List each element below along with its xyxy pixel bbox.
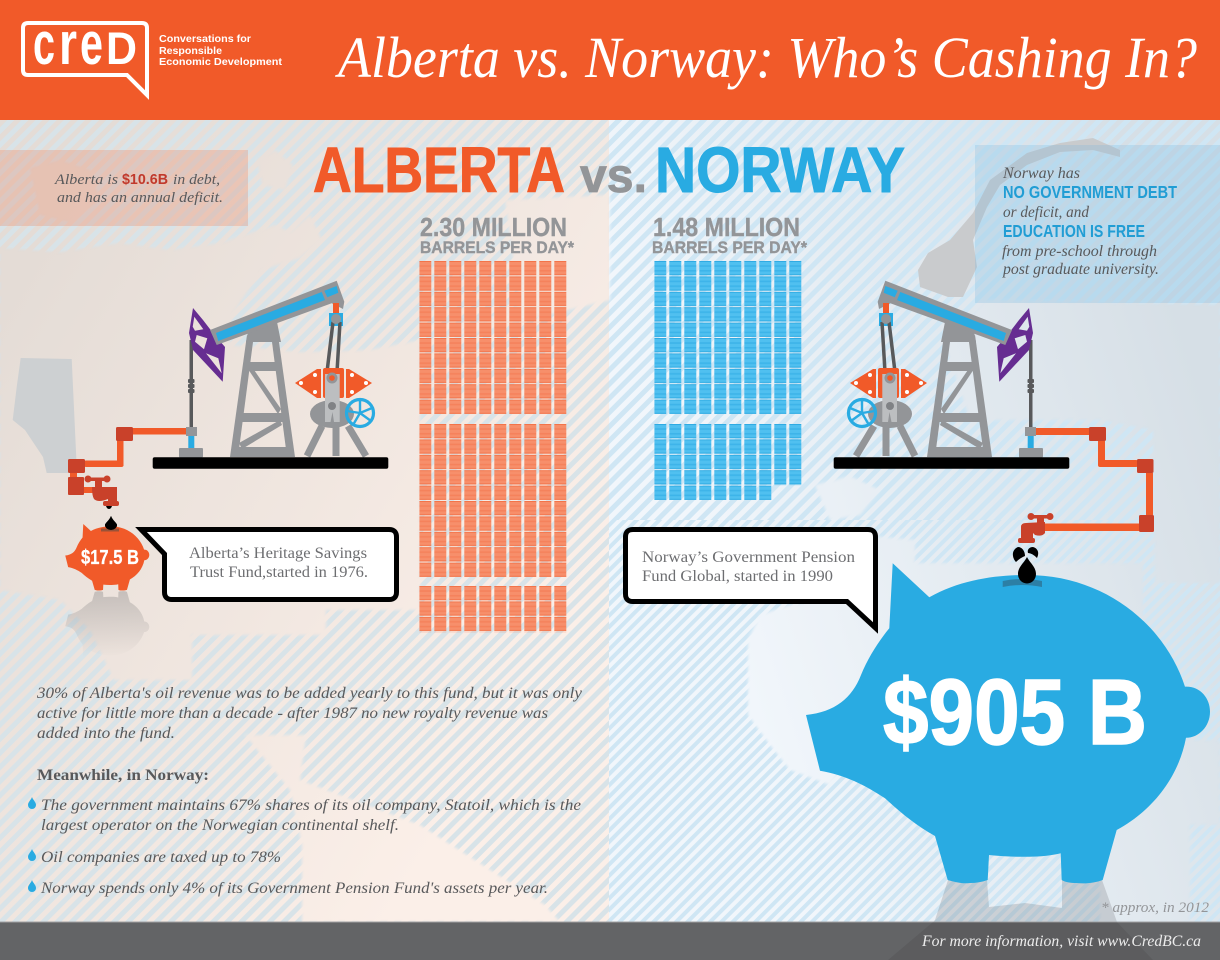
paragraph: Alberta revenue: 30% of Alberta's oil revenue was to be added yearly to this fund, but it was only xyxy=(36,685,583,702)
speech bubble: Norway fund xyxy=(626,530,876,628)
callout: Norway debt: post graduate university. xyxy=(1002,261,1159,278)
oil drops: Alberta xyxy=(105,506,117,530)
callout: Norway debt: EDUCATION IS FREE xyxy=(1003,221,1145,241)
bullet: pension spending: Norway spends only 4% of its Government Pension Fund's assets per year. xyxy=(40,880,548,897)
map: Norway xyxy=(918,138,1120,297)
speech bubble: Norway fund: Norway’s Government Pension xyxy=(642,549,855,566)
reflection: small pig xyxy=(65,591,149,658)
speech bubble: Alberta fund xyxy=(141,530,396,600)
bullet: oil tax: Oil companies are taxed up to 78% xyxy=(41,849,281,866)
CRED logo xyxy=(23,10,147,95)
pipe and faucet: Alberta xyxy=(68,427,186,506)
Norway production label: BARRELS PER DAY* xyxy=(652,238,807,257)
logo tagline: Conversations for xyxy=(159,33,251,45)
map: Alberta xyxy=(13,358,77,473)
pipe and faucet: Norway xyxy=(1018,427,1154,543)
heading: Alberta vs Norway: ALBERTA xyxy=(313,134,565,206)
speech bubble: Norway fund: Fund Global, started in 1990 xyxy=(642,568,833,585)
logo tagline xyxy=(159,33,283,68)
barrel grid: Norway xyxy=(654,261,802,501)
pumpjack: Norway xyxy=(834,281,1069,469)
paragraph: Alberta revenue: added into the fund. xyxy=(37,725,175,742)
callout: Norway debt: Norway has xyxy=(1002,165,1080,182)
CRED logo: r xyxy=(59,10,77,77)
logo tagline: Economic Development xyxy=(159,56,283,68)
header band xyxy=(0,0,1220,120)
paragraph: Alberta revenue xyxy=(36,685,583,742)
barrel grid: Alberta xyxy=(419,261,567,632)
big piggy bank: Norway xyxy=(806,563,1210,883)
logo tagline: Responsible xyxy=(159,45,222,57)
Norway production label: 1.48 MILLION xyxy=(653,212,800,242)
heading: Alberta vs Norway: vs. xyxy=(580,150,647,203)
callout: Alberta debt: and has an annual deficit. xyxy=(57,190,223,206)
CRED logo: D xyxy=(106,23,137,74)
footnote: * approx, in 2012 xyxy=(1101,900,1210,916)
CRED logo: e xyxy=(80,10,103,77)
callout: Norway debt: or deficit, and xyxy=(1003,204,1089,221)
heading: Alberta vs Norway: NORWAY xyxy=(655,134,905,206)
reflection: big pig xyxy=(933,880,1117,922)
subheading: Meanwhile in Norway: Meanwhile, in Norway: xyxy=(37,767,209,784)
small piggy bank: Alberta xyxy=(65,516,149,591)
Alberta production label xyxy=(420,212,574,257)
big piggy bank: Norway: $905 B xyxy=(883,660,1147,764)
callout: Norway debt xyxy=(975,145,1220,303)
Norway production label xyxy=(652,212,807,257)
callout: Norway debt: NO GOVERNMENT DEBT xyxy=(1003,182,1177,202)
paragraph: Alberta revenue: active for little more than a decade - after 1987 no new royalty revenue was xyxy=(37,705,548,722)
heading: Alberta vs Norway xyxy=(313,134,905,206)
callout: Alberta debt: in debt, xyxy=(173,172,220,188)
bullet: Statoil shares xyxy=(28,797,581,834)
speech bubble: Alberta fund: Alberta’s Heritage Savings xyxy=(189,545,367,562)
pumpjack: Alberta xyxy=(153,281,388,469)
callout: Alberta debt: $10.6B xyxy=(122,171,168,188)
callout: Norway debt: from pre-school through xyxy=(1002,243,1157,260)
Alberta production label: BARRELS PER DAY* xyxy=(420,238,574,257)
small piggy bank: Alberta: $17.5 B xyxy=(81,547,139,569)
bullet: Statoil shares: The government maintains 67% shares of its oil company, Statoil, which is the xyxy=(41,797,581,814)
speech bubble: Alberta fund: Trust Fund,started in 1976. xyxy=(190,564,368,581)
oil drops: Norway xyxy=(1013,547,1038,584)
footer bar xyxy=(0,922,1220,960)
footer text: For more information, visit www.CredBC.ca xyxy=(921,933,1201,950)
Alberta production label: 2.30 MILLION xyxy=(420,212,567,242)
callout: Alberta debt: Alberta is xyxy=(54,172,118,188)
CRED logo: c xyxy=(33,10,55,77)
callout: Alberta debt xyxy=(0,150,248,226)
bullet: Statoil shares: largest operator on the Norwegian continental shelf. xyxy=(41,817,399,834)
reflection on footer xyxy=(888,922,1153,960)
